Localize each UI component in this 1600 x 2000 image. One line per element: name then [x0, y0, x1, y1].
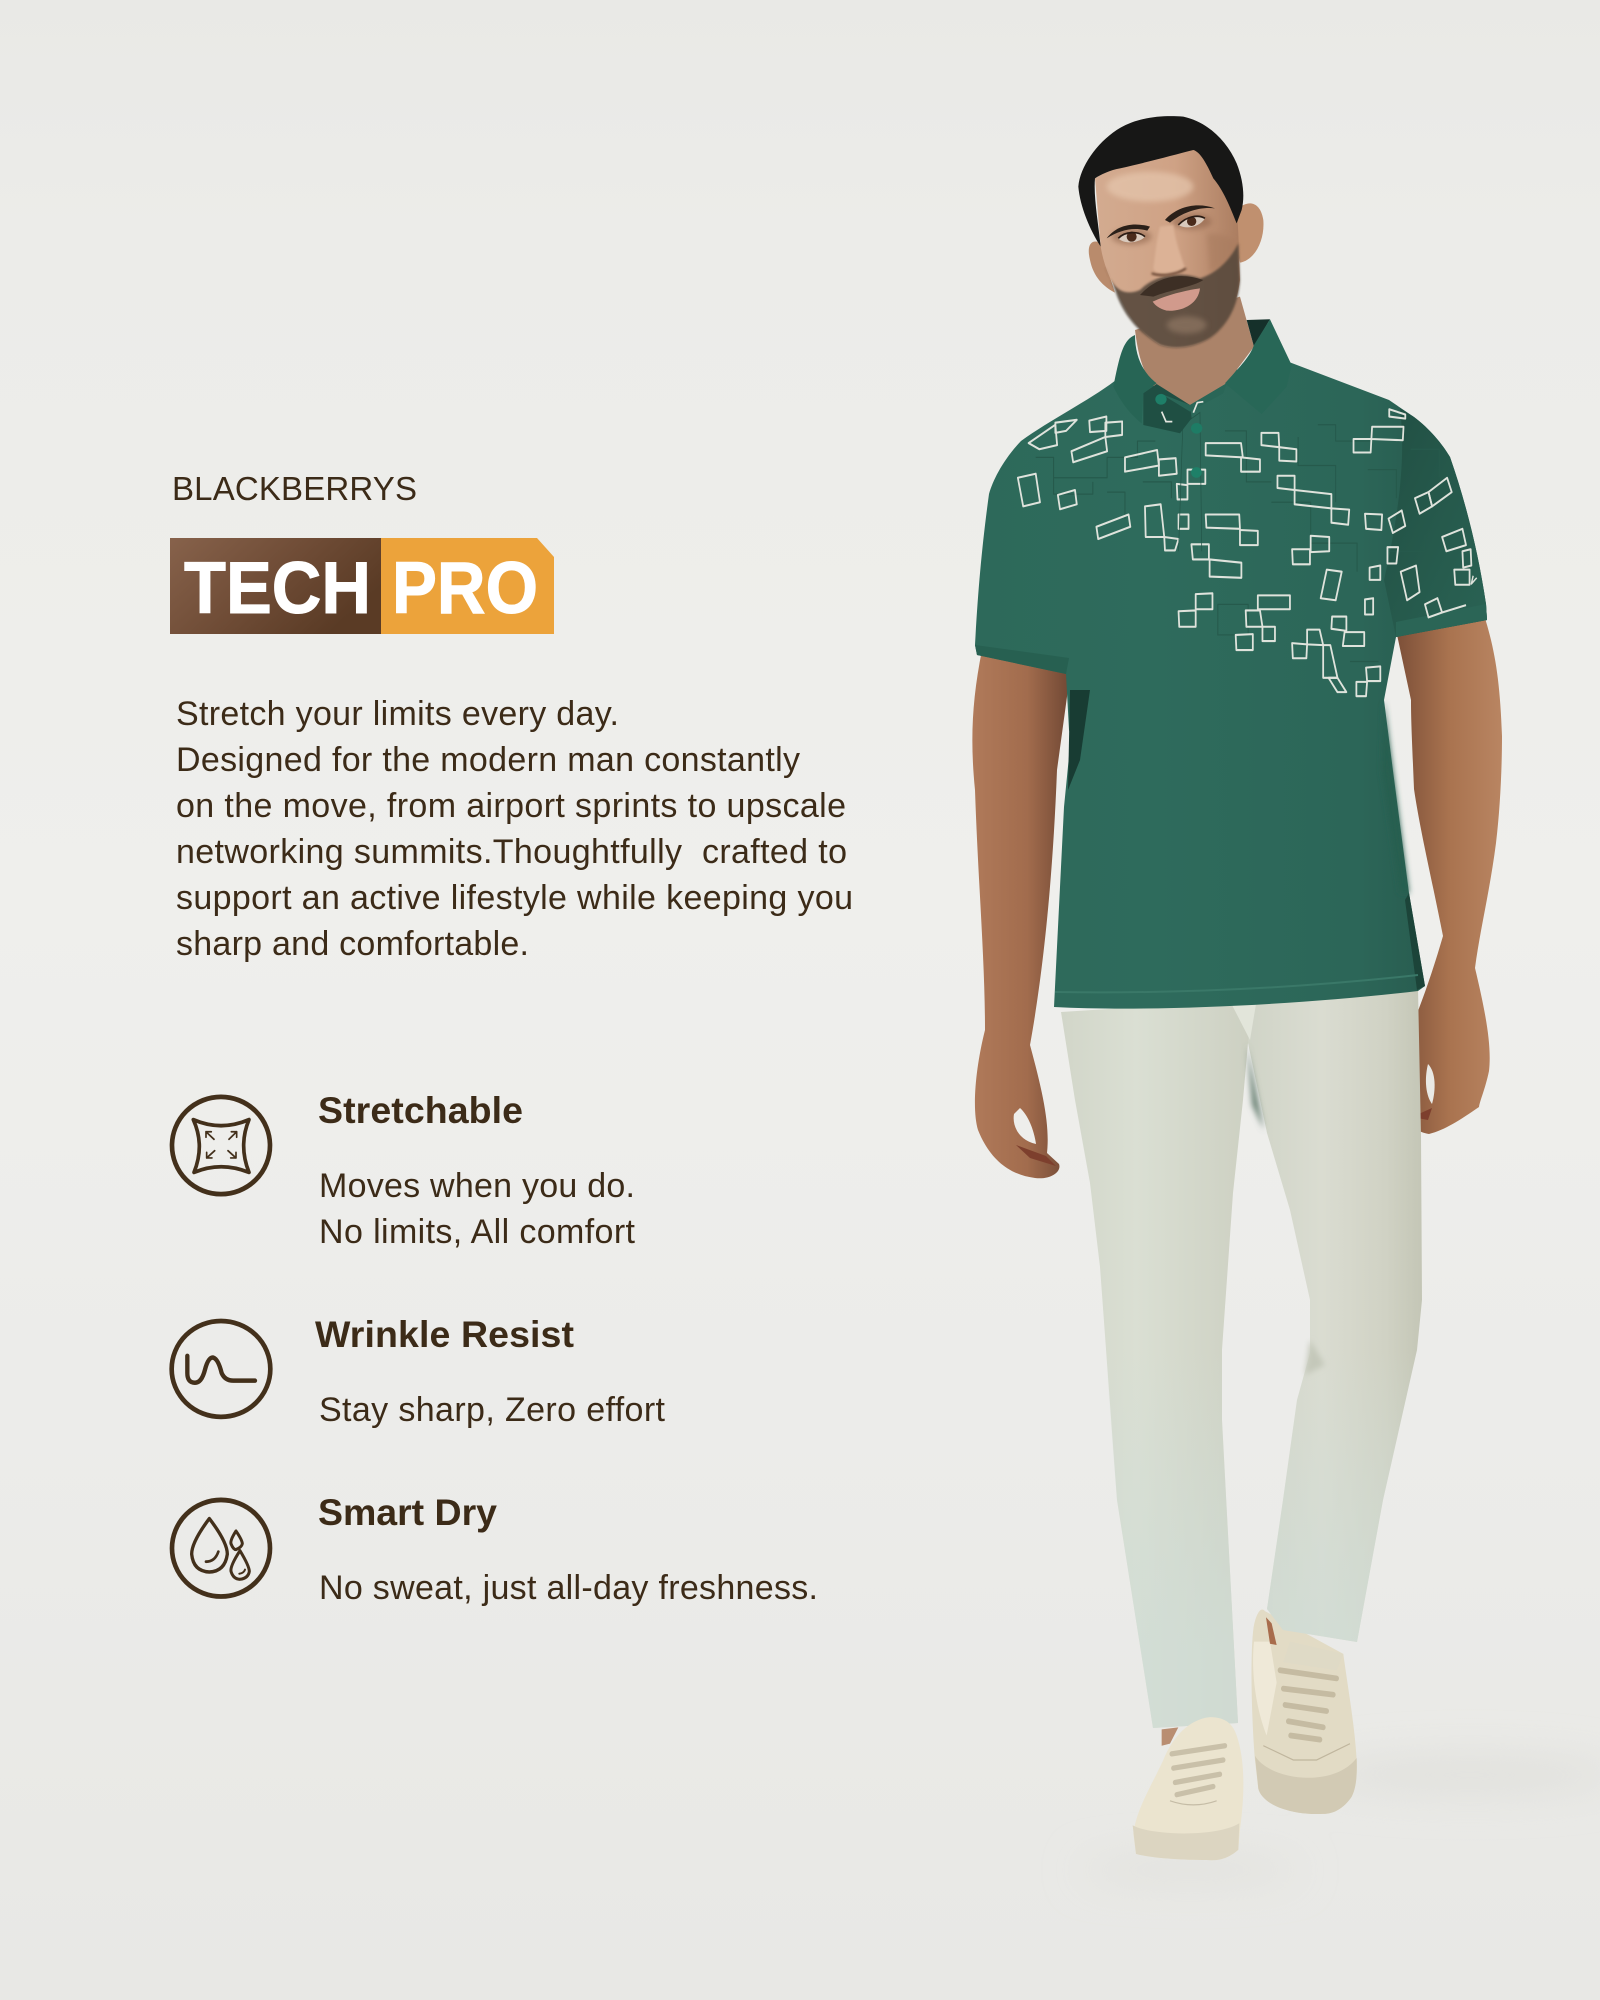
placket and lower buttons — [1179, 412, 1202, 551]
floor shadow — [1080, 1757, 1600, 1882]
tech pro logo badge: PRO — [392, 548, 538, 629]
hair — [1078, 116, 1243, 247]
neck and collar — [1113, 297, 1292, 434]
intro paragraph: networking summits.Thoughtfully crafted to — [176, 833, 847, 871]
face — [1095, 143, 1240, 348]
right arm and hand — [1396, 615, 1502, 1134]
eyebrows — [1107, 224, 1150, 238]
head — [1078, 116, 1263, 348]
brand name: BLACKBERRYS — [172, 470, 417, 507]
icon: wrinkle resist — [172, 1321, 270, 1417]
left arm and hand — [972, 650, 1072, 1178]
intro paragraph — [176, 695, 853, 963]
trousers — [1061, 988, 1422, 1728]
icon: stretchable — [172, 1097, 270, 1194]
feature text: stretchable: No limits, All comfort — [319, 1213, 636, 1251]
feature heading: wrinkle resist: Wrinkle Resist — [315, 1313, 574, 1355]
moustache — [1140, 276, 1203, 297]
feature text: wrinkle resist: Stay sharp, Zero effort — [319, 1391, 666, 1429]
cheek shading — [1207, 233, 1238, 273]
intro paragraph: Stretch your limits every day. — [176, 695, 619, 733]
feature text: stretchable: Moves when you do. — [319, 1167, 635, 1205]
intro paragraph: Designed for the modern man constantly — [176, 741, 800, 779]
sneaker right — [1251, 1609, 1357, 1814]
feature text: smart dry: No sweat, just all-day freshness. — [319, 1569, 818, 1607]
polo shirt body — [975, 362, 1487, 1009]
model photo illustration — [972, 116, 1502, 1860]
feature heading: stretchable: Stretchable — [318, 1089, 523, 1131]
tech pro logo badge — [170, 538, 554, 634]
feature heading: smart dry: Smart Dry — [318, 1491, 497, 1533]
intro paragraph: sharp and comfortable. — [176, 925, 529, 963]
shirt graphic print — [1018, 409, 1477, 696]
feature text: stretchable — [319, 1167, 636, 1251]
eye sockets — [1112, 214, 1212, 245]
beard — [1105, 243, 1240, 348]
lips — [1153, 288, 1200, 311]
forehead highlight — [1107, 172, 1193, 202]
chin patch — [1167, 316, 1207, 334]
tech pro logo badge: TECH — [184, 548, 371, 629]
icon: smart dry — [172, 1500, 270, 1597]
intro paragraph: on the move, from airport sprints to upscale — [176, 787, 846, 825]
nose — [1153, 225, 1185, 275]
ears — [1237, 203, 1263, 263]
eyes — [1118, 233, 1145, 242]
intro paragraph: support an active lifestyle while keeping you — [176, 879, 853, 917]
sneaker left — [1133, 1717, 1243, 1860]
